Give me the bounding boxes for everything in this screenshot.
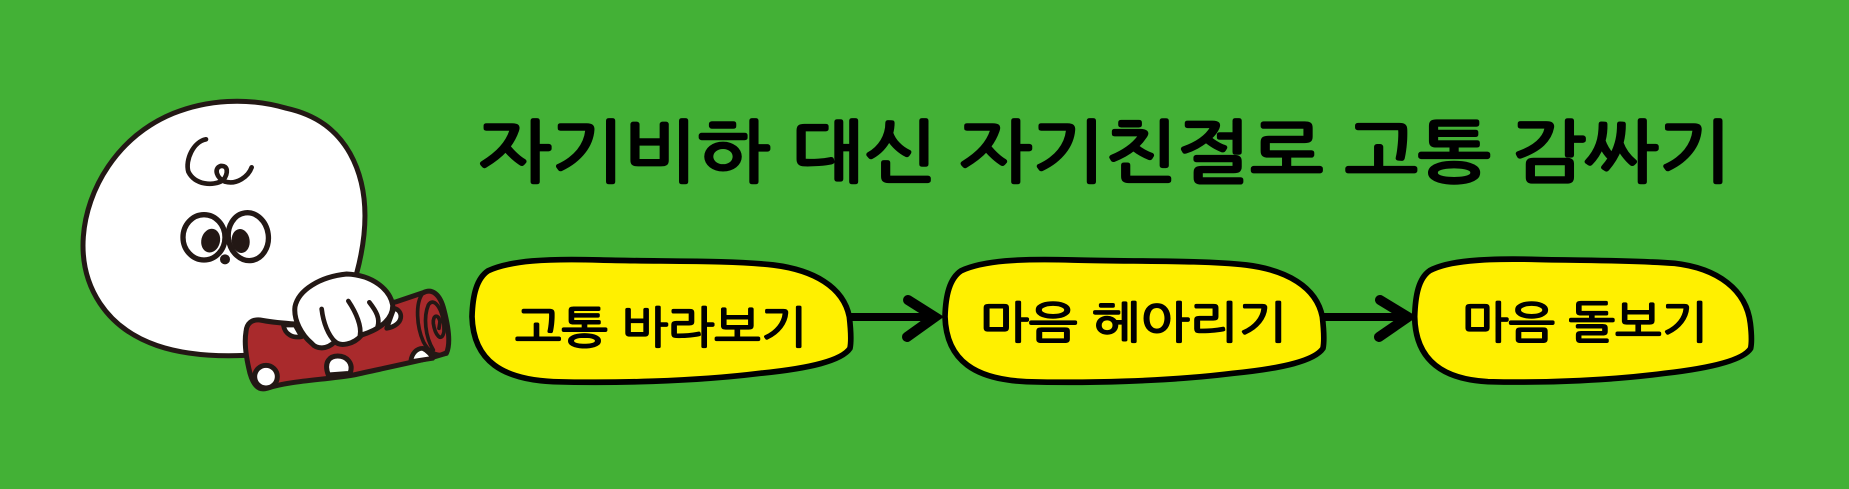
mat dot: under fist right xyxy=(387,308,401,328)
mat dot: bottom right xyxy=(411,348,433,362)
character: round head holding a rolled mat xyxy=(83,101,449,389)
step 2: bubble xyxy=(945,260,1324,382)
mat dot: bottom centre xyxy=(327,356,351,375)
arrow 1 xyxy=(851,300,935,337)
head outline xyxy=(83,101,365,356)
title: 자기비하 대신 자기친절로 고통 감싸기 xyxy=(478,115,1731,191)
label: 마음 헤아리기: 마음 헤아리기 xyxy=(980,299,1287,348)
right pupil xyxy=(230,228,251,254)
rolled mat xyxy=(245,291,449,389)
step 1: bubble xyxy=(472,260,851,382)
head fill xyxy=(83,101,365,356)
character face xyxy=(83,101,365,356)
rolled mat and fist xyxy=(245,274,449,389)
hair curl xyxy=(188,139,252,184)
left pupil xyxy=(199,227,223,255)
fist xyxy=(295,274,393,348)
arrow 2 xyxy=(1324,300,1408,337)
right eye xyxy=(225,210,271,263)
step 3: bubble xyxy=(1415,259,1751,382)
label: 마음 돌보기: 마음 돌보기 xyxy=(1462,299,1708,348)
bubble shape 2 xyxy=(945,260,1324,382)
label: 고통 바라보기: 고통 바라보기 xyxy=(515,304,807,353)
left eye xyxy=(183,215,225,260)
mat spiral end xyxy=(418,293,447,355)
bubble shape 3 xyxy=(1415,259,1751,382)
finger lines xyxy=(322,301,378,342)
bubble shape 1 xyxy=(472,260,851,382)
mat dot: bottom left xyxy=(255,365,277,388)
mat dot: under fist left xyxy=(283,325,302,337)
nose xyxy=(220,254,230,264)
